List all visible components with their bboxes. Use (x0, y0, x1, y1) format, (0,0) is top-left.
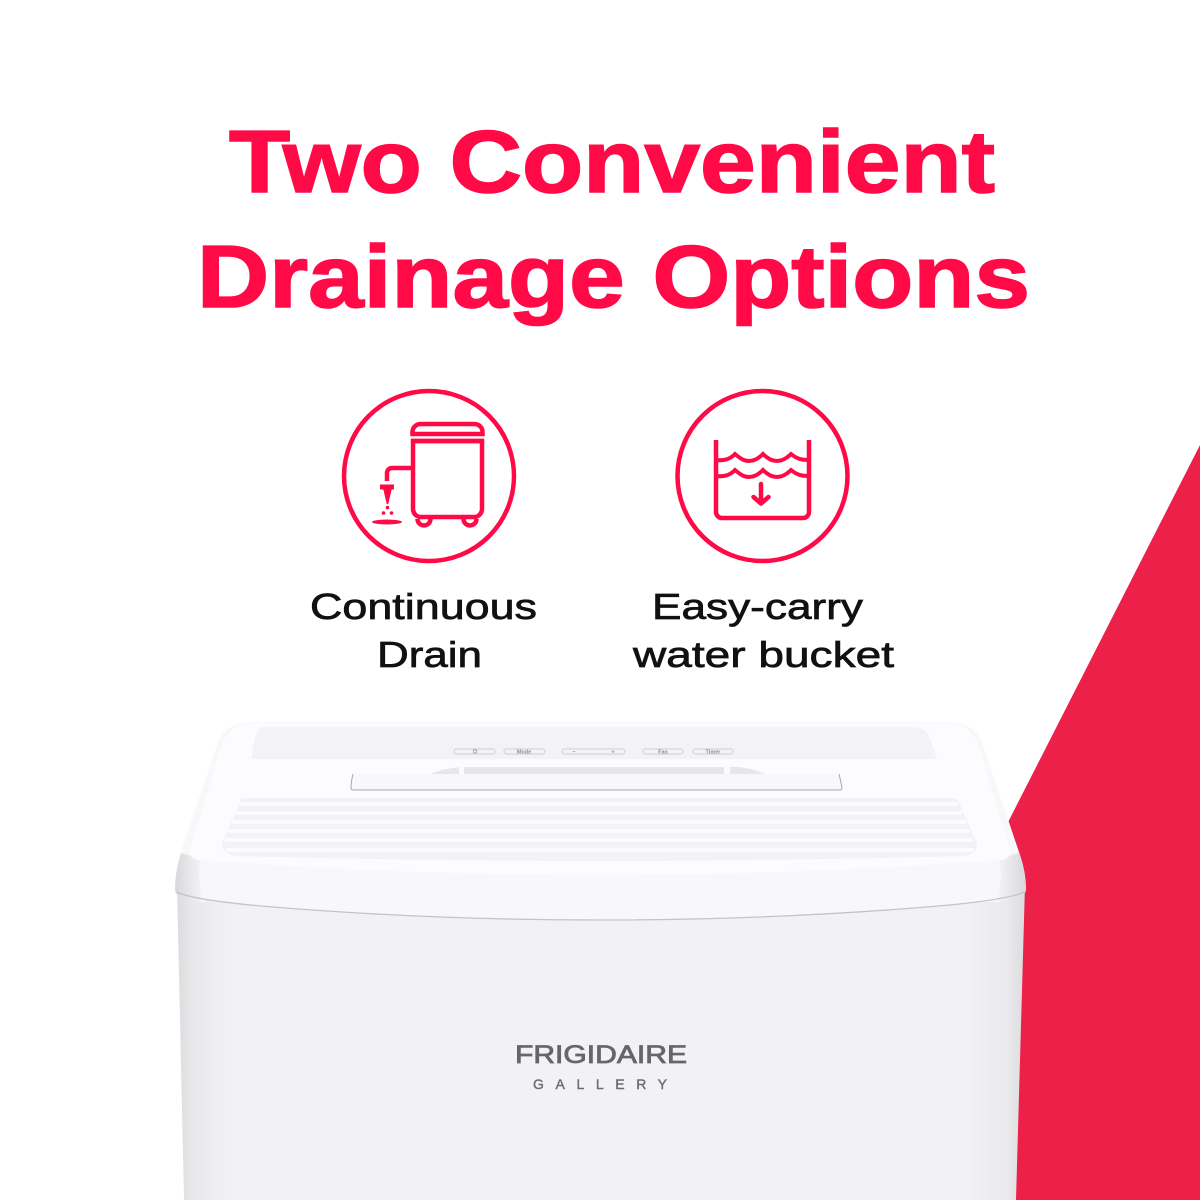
brand logo: FRIGIDAIRE (515, 1041, 687, 1069)
control button labels: ⏻ (473, 748, 478, 756)
product: dehumidifier (175, 722, 1026, 1200)
title (197, 112, 1030, 326)
air vent grille (222, 798, 977, 861)
seam line (177, 892, 1024, 920)
lid corner shading left (175, 853, 205, 903)
control button labels: Fan (658, 750, 669, 756)
control buttons (454, 749, 733, 754)
label: continuous drain: Continuous (310, 586, 537, 627)
icon: continuous drain (344, 391, 514, 561)
title: Two Convenient (229, 112, 995, 211)
icon: water bucket (678, 391, 848, 561)
carry handle (430, 767, 765, 774)
product top lid band (175, 722, 1026, 920)
control button labels: − (572, 750, 576, 756)
control button labels: Mode (517, 750, 531, 756)
label: continuous drain: Drain (377, 634, 482, 675)
control button labels: + (611, 750, 615, 756)
brand logo (515, 1041, 687, 1092)
product lower body (177, 885, 1025, 1200)
brand logo: GALLERY (533, 1076, 668, 1092)
control button labels (473, 748, 721, 756)
label: easy-carry water bucket (632, 586, 894, 675)
label: easy-carry water bucket: water bucket (632, 634, 894, 675)
title: Drainage Options (197, 227, 1030, 326)
product top surface (190, 723, 1010, 875)
control panel (251, 727, 937, 759)
label: continuous drain (310, 586, 537, 675)
label: easy-carry water bucket: Easy-carry (652, 586, 863, 627)
lid corner shading right (995, 853, 1026, 903)
control button labels: Timer (706, 750, 721, 756)
red diagonal background shape (1000, 445, 1200, 1200)
